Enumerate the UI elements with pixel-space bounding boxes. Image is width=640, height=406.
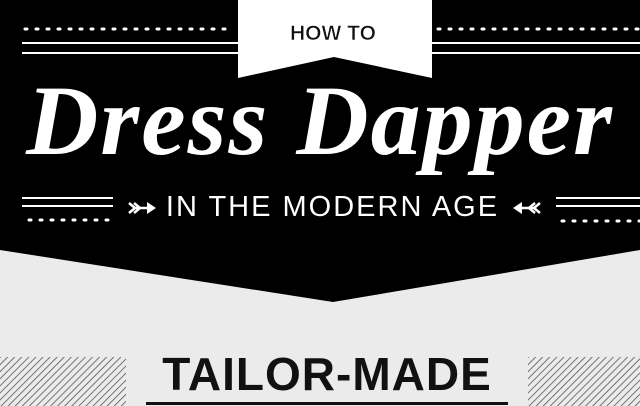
tab: how to <box>238 0 432 78</box>
hatching left <box>0 357 126 406</box>
title: Dress Dapper <box>26 65 614 176</box>
subtitle: IN THE MODERN AGE <box>166 191 499 223</box>
section heading: tailor-made: TAILOR-MADE <box>162 348 492 400</box>
icon: right arrow <box>513 202 541 214</box>
hatching right <box>528 357 640 406</box>
icon: left arrow <box>128 202 156 214</box>
tab: how to: HOW TO <box>290 22 376 45</box>
